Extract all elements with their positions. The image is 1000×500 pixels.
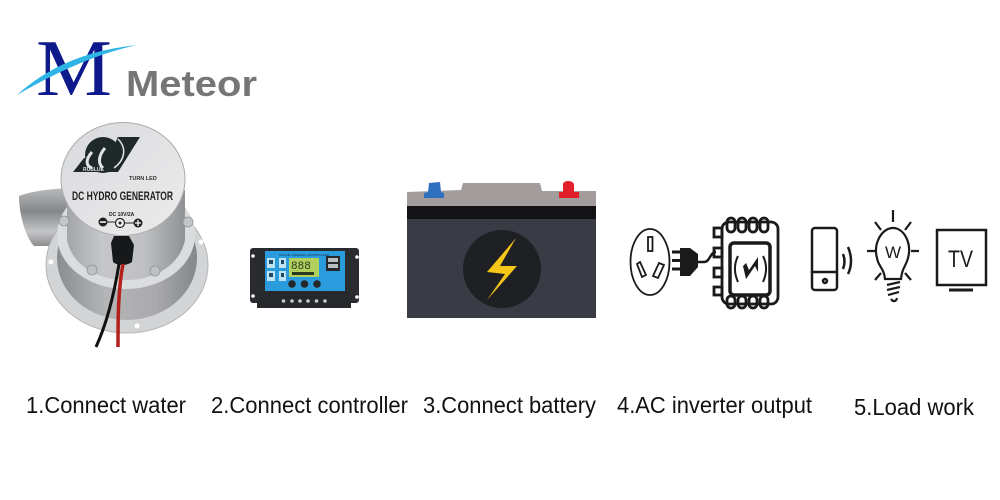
generator cable gland xyxy=(111,236,134,265)
logo letter M: M xyxy=(36,25,112,113)
logo wordmark: Meteor xyxy=(126,63,257,104)
icon: DC hydro generator xyxy=(19,122,208,347)
step label 5: 5.Load work xyxy=(854,394,974,420)
battery emblem circle xyxy=(463,230,541,308)
generator flange xyxy=(46,196,208,333)
battery black band xyxy=(407,206,596,219)
icon: light bulb xyxy=(867,210,919,301)
generator title: DC HYDRO GENERATOR xyxy=(72,189,173,203)
generator top disc xyxy=(61,122,185,236)
icon: TV xyxy=(937,230,986,290)
generator red wire xyxy=(118,264,123,347)
controller casing xyxy=(250,248,359,303)
inverter xyxy=(714,218,778,308)
generator inlet pipe xyxy=(19,188,70,246)
logo swoosh xyxy=(17,45,137,95)
step label 2: 2.Connect controller xyxy=(211,392,408,418)
icon: AC socket and inverter xyxy=(630,218,778,308)
socket xyxy=(630,229,670,295)
generator brand emblem xyxy=(73,137,140,173)
battery positive terminal xyxy=(559,181,579,198)
battery lid xyxy=(407,183,596,206)
controller panel title: SOLAR CHARGE CONTROLLER xyxy=(279,253,330,257)
controller blue panel xyxy=(265,251,345,291)
generator rating: DC 10V/2A xyxy=(109,212,135,218)
controller terminal strip xyxy=(257,292,351,308)
logo: Meteor xyxy=(17,25,257,113)
battery negative terminal xyxy=(424,182,444,198)
controller LCD: 888 xyxy=(291,261,311,273)
generator black wire xyxy=(96,264,119,347)
plug and cord xyxy=(672,248,716,276)
icon: solar charge controller xyxy=(250,248,359,308)
controller USB ports xyxy=(326,256,340,271)
bulb label: W xyxy=(885,243,901,262)
battery case xyxy=(407,219,596,318)
icon: lightning bolt xyxy=(487,238,517,300)
generator LED label: TURN LED xyxy=(129,176,157,182)
icon: phone xyxy=(812,228,851,290)
generator polarity symbols xyxy=(98,218,142,228)
controller status icons xyxy=(267,258,286,281)
step label 4: 4.AC inverter output xyxy=(617,392,813,418)
step label 1: 1.Connect water xyxy=(26,392,186,418)
controller buttons xyxy=(288,280,321,288)
generator brand emblem: RUBLUE xyxy=(83,167,104,173)
TV label: TV xyxy=(948,246,973,273)
icon: battery xyxy=(407,181,596,318)
step label 3: 3.Connect battery xyxy=(423,392,596,418)
generator body xyxy=(57,181,195,289)
